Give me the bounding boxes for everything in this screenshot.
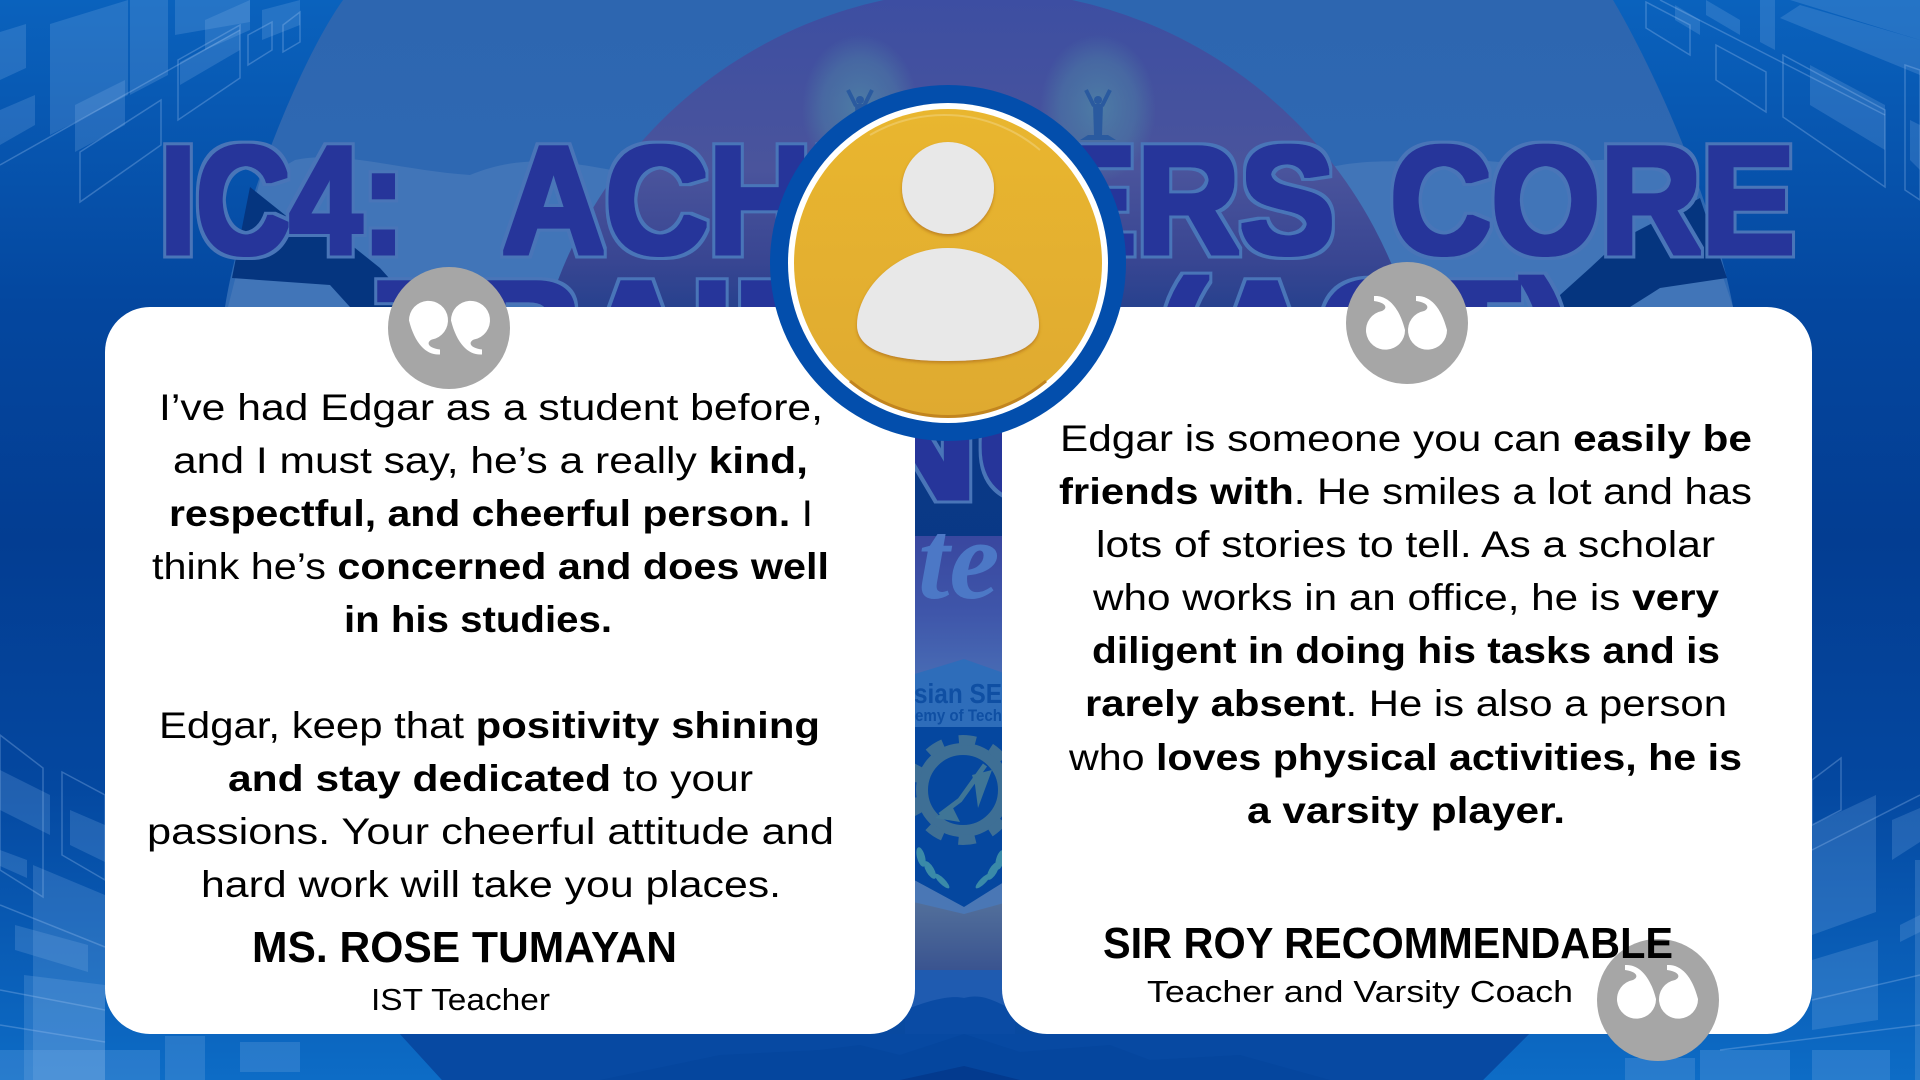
text block: right testimonial: a varsity player.	[1247, 790, 1565, 831]
tech panels: bottom right	[1625, 758, 1920, 1080]
academy name: sian SE	[914, 678, 1002, 709]
right attribution role: Teacher and Varsity Coach	[1147, 974, 1573, 1009]
text block: left testimonial: in his studies.	[344, 599, 612, 640]
text block: left testimonial: think he’s concerned and does well	[152, 546, 829, 587]
tech panels: bottom left	[0, 735, 300, 1080]
script word: ste	[873, 498, 1000, 623]
background title	[160, 115, 1795, 531]
text block: right testimonial: friends with . He smiles a lot and has	[1059, 471, 1752, 512]
icon: right quote	[1346, 262, 1468, 384]
text block: left testimonial: and stay dedicated to your	[228, 758, 753, 799]
tech panels: top left	[0, 0, 300, 202]
avatar body	[857, 248, 1039, 361]
text block: right testimonial	[1059, 418, 1752, 831]
text block: left testimonial: respectful, and cheerful person. I	[169, 493, 813, 534]
background title: ACHIEVERS	[502, 115, 1335, 286]
panel: right testimonial card	[1002, 307, 1812, 1034]
dark mountain left	[232, 187, 415, 307]
text block: right testimonial: who loves physical activities, he is	[1068, 737, 1742, 778]
left attribution role: IST Teacher	[371, 982, 550, 1017]
panel: left testimonial card	[105, 307, 915, 1034]
text block: left testimonial: I’ve had Edgar as a student before,	[159, 387, 823, 428]
gear emblem	[913, 740, 1013, 840]
text block: left testimonial: passions. Your cheerful attitude and	[147, 811, 834, 852]
text block: right testimonial: Edgar is someone you can easily be	[1060, 418, 1752, 459]
left attribution name: MS. ROSE TUMAYAN	[252, 923, 677, 972]
academy subtitle: emy of Tech	[915, 706, 1002, 725]
text block: left testimonial: and I must say, he’s a really kind,	[173, 440, 808, 481]
ridge right	[1320, 159, 1733, 307]
icon: bottom quote	[1597, 939, 1719, 1061]
background title: TRAINING (ACT)	[378, 250, 1571, 421]
text block: right testimonial: diligent in doing his tasks and is	[1092, 630, 1720, 671]
center strip imagery	[873, 498, 1015, 1034]
bottom mountains	[400, 1034, 1529, 1080]
background title: NG	[862, 360, 1102, 531]
glow and figure left	[802, 34, 918, 182]
text block: left testimonial	[147, 387, 834, 905]
icon: left quote	[388, 267, 510, 389]
text block: left testimonial: Edgar, keep that positivity shining	[159, 705, 820, 746]
light ridges	[228, 157, 640, 307]
text block: right testimonial: rarely absent . He is also a person	[1085, 683, 1727, 724]
background title: CORE	[1390, 115, 1795, 286]
text block: right testimonial: lots of stories to tell. As a scholar	[1096, 524, 1715, 565]
glow and figure right	[1040, 34, 1156, 182]
dark mountain right	[1545, 198, 1727, 307]
avatar head	[902, 142, 994, 234]
right attribution name: SIR ROY RECOMMENDABLE	[1103, 919, 1673, 968]
purple circle	[529, 0, 1427, 888]
background title: IC4:	[160, 115, 405, 286]
text block: right testimonial: who works in an office, he is very	[1092, 577, 1719, 618]
tech panels: top right	[1646, 0, 1920, 200]
wreath	[915, 846, 1006, 890]
icon: avatar badge	[770, 85, 1126, 441]
text block: left testimonial: hard work will take you places.	[201, 864, 781, 905]
